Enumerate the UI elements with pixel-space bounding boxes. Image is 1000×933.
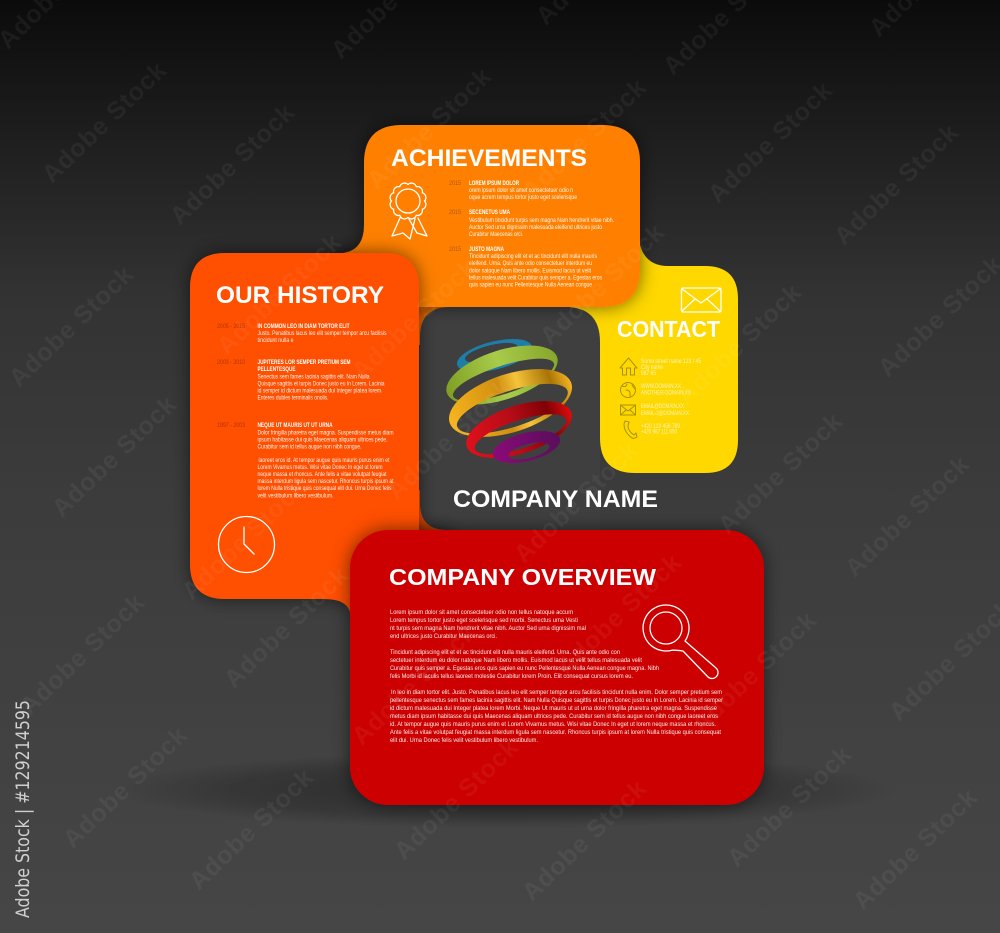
text: web bbox=[641, 383, 691, 396]
text: overview paragraph 1: Lorem ipsum dolor sit amet consectetuer odio non tellus natoque accum bbox=[390, 609, 573, 616]
watermarks: Adobe Stock bbox=[703, 76, 838, 208]
text: history 3: Curabitur sem id tellus augue non nibh congue. bbox=[258, 444, 362, 450]
text: history 3: velit vestibulum libero vestibulum. bbox=[258, 492, 334, 500]
text: overview paragraph 2: felis Morbi id iaculis tellus laoreet molestie Curabitur lorem Proin. Elit consequat cursus lorem eu. bbox=[390, 673, 633, 680]
icon: phone bbox=[624, 421, 637, 438]
text: achievement 3: eleifend. Urna. Quis ante odio consectetuer interdum eu bbox=[469, 260, 592, 267]
watermarks: Adobe Stock bbox=[382, 373, 517, 505]
watermarks: Adobe Stock bbox=[389, 733, 524, 865]
text: phone: +420 123 456 789 bbox=[641, 423, 680, 430]
watermarks: Adobe Stock bbox=[687, 606, 822, 738]
text: overview paragraph 3: elit dui. Urna Donec felis velit vestibulum libero vestibulum. bbox=[390, 737, 538, 744]
text: overview paragraph 2 bbox=[390, 649, 659, 680]
text: web: WWW.DOMAIN.XX bbox=[641, 383, 681, 390]
text: history 2: PELLENTESQUE bbox=[258, 366, 296, 373]
text: achievement 2 bbox=[449, 209, 614, 238]
panel: our history bbox=[190, 253, 450, 612]
text: achievement 1: LOREM IPSUM DOLOR bbox=[469, 180, 519, 187]
panel: achievements backing corner bbox=[405, 295, 455, 345]
watermarks: Adobe Stock bbox=[177, 473, 312, 605]
panel: company overview bbox=[350, 530, 764, 805]
panel: contact backing bbox=[570, 245, 705, 400]
watermarks: Adobe Stock bbox=[219, 561, 354, 693]
text: history 1: Justo. Penatibus lacus leo elit semper tempor arcu facilisis bbox=[258, 330, 386, 337]
text: overview paragraph 3: metus diam ipsum habitasse dui quis Maecenas aliquam ultrices pede. Curabitur sem id tellus augue non nibh congue laoreet eros bbox=[390, 713, 718, 720]
text: overview paragraph 2: Curabitur quis semper a. Egestas eros quis sapien eu nunc Pellentesque Nulla Aenean congue magna. Nibh bbox=[390, 665, 659, 672]
text: overview paragraph 1: end ultrices justo Curabitur Maecenas orci. bbox=[390, 633, 497, 640]
text: web: ANOTHER-DOMAIN.XX bbox=[641, 390, 691, 396]
panel: contact bbox=[600, 266, 738, 473]
heading: company overview: COMPANY OVERVIEW bbox=[389, 564, 656, 590]
text: history 3 bbox=[217, 422, 394, 500]
text: overview paragraph 3: pellentesque senectus sem fames lacinia sagittis elit. Nam Nulla Quisque sagittis et turpis Donec justo eu In Lorem. Lacinia id semper bbox=[390, 697, 724, 704]
watermarks: Adobe Stock bbox=[552, 548, 687, 680]
text: achievement 2: Vestibulum tincidunt turpis sem magna Nam hendrerit vitae nibh. bbox=[469, 217, 614, 224]
text: achievement 2: SECENETUS UMA bbox=[469, 209, 510, 216]
floor shadow bbox=[110, 752, 900, 828]
watermarks: Adobe Stock bbox=[4, 260, 139, 392]
text: achievement 2: Curabitur Maecenas orci. bbox=[469, 231, 523, 238]
text: address: Some street name 123 / 45 bbox=[641, 358, 701, 365]
text: achievement 3 bbox=[449, 246, 602, 288]
text: history 3: NEQUE UT MAURIS UT UT URNA bbox=[258, 422, 333, 429]
icon: striped globe logo bbox=[439, 333, 580, 469]
watermarks: Adobe Stock bbox=[840, 450, 975, 582]
icon: house bbox=[620, 358, 637, 375]
text: phone: +420 987 111 850 bbox=[641, 428, 677, 436]
text: history 3: Dolor fringilla pharetra eget magna. Suspendisse metus diam bbox=[258, 430, 394, 436]
panel: company name bbox=[420, 307, 658, 530]
watermarks: Adobe Stock bbox=[517, 73, 652, 205]
watermarks: Adobe Stock bbox=[347, 253, 482, 385]
text: history 1: IN COMMON LEO IN DIAM TORTOR ELIT bbox=[258, 323, 350, 330]
watermarks: Adobe Stock bbox=[713, 407, 848, 539]
text: achievement 3: JUSTO MAGNA bbox=[469, 246, 504, 253]
text: history 1: 2005 - 2015 bbox=[217, 323, 245, 330]
heading: our history: OUR HISTORY bbox=[216, 282, 384, 309]
watermarks: Adobe Stock bbox=[165, 98, 300, 230]
text: achievement 1: orem ipsum dolor sit amet consectetuer odio n bbox=[469, 187, 573, 194]
text: achievement 3: dolor natoque Nam libero mollis. Euismod lacus ut velit bbox=[469, 268, 591, 274]
text: overview paragraph 1: Lorem tempus tortor justo eget scelerisque sed morbi. Senectus urna Vesti bbox=[390, 617, 578, 624]
icon: award ribbon bbox=[390, 183, 427, 239]
text: overview paragraph 1: nt turpis sem magna Nam hendrerit vitae nibh. Auctor Sed urna dignissim mal bbox=[390, 625, 586, 632]
text: achievement 3: quis sapien eu nunc Pellentesque Nulla Aenean congue bbox=[469, 282, 592, 288]
text: overview paragraph 1 bbox=[390, 609, 586, 640]
text: overview paragraph 3: id. At tempor augue quis mauris purus enim et Lorem Vivamus metus. Wisi vitae Donec In eget ut lorem neque massa et rhoncus. bbox=[390, 721, 716, 728]
text: achievement 1: 2015 bbox=[449, 180, 461, 187]
watermarks: Adobe Stock bbox=[535, 218, 670, 350]
watermarks: Adobe Stock bbox=[362, 62, 497, 194]
icon: globe bbox=[620, 382, 636, 398]
watermarks: Adobe Stock bbox=[672, 278, 807, 410]
panel: history backing corner bbox=[405, 490, 450, 540]
text: history 3: 1997 - 2003 bbox=[217, 422, 245, 429]
text: phone bbox=[641, 423, 680, 436]
text: history 3: neque massa et rhoncus. Ante felis a vitae volutpat feugiat bbox=[258, 471, 387, 478]
watermarks: Adobe Stock bbox=[848, 783, 983, 915]
text: overview paragraph 3: Ante felis a vitae volutpat feugiat massa interdum ligula sem nascetur. Rhoncus turpis ipsum at lorem Nulla tristique quis consequat bbox=[390, 729, 721, 736]
text: history 3: lorem Nulla tristique quis consequat elit dui. Urna Donec felis bbox=[258, 485, 392, 492]
text: overview paragraph 2: sectetuer interdum eu dolor natoque Nam libero mollis. Euismod lacus ut velit tellus malesuada velit bbox=[390, 657, 642, 664]
text: history 3: laoreet eros id. At tempor augue quis mauris purus enim et bbox=[258, 457, 390, 464]
text: history 2: Enteres dubles terminalis onolis. bbox=[258, 394, 329, 402]
watermarks: Adobe Stock bbox=[829, 118, 964, 250]
watermarks: Adobe Stock bbox=[347, 618, 482, 750]
heading: contact: CONTACT bbox=[617, 316, 720, 342]
icon: small envelope bbox=[620, 405, 636, 415]
text: history 2: 2003 - 2010 bbox=[217, 359, 245, 366]
text: history 2: JUPITERES LOR SEMPER PRETIUM SEM bbox=[258, 359, 350, 366]
text: address bbox=[641, 358, 701, 377]
text: overview paragraph 2: Tincidunt adipiscing elit et et ac tincidunt elit nulla mauris eleifend. Urna. Quis ante odio con bbox=[390, 649, 620, 656]
text: history 3: ipsum habitasse dui quis Maecenas aliquam ultrices pede. bbox=[258, 436, 388, 444]
text: overview paragraph 3 bbox=[390, 689, 724, 744]
text: history 3: Lorem Vivamus metus. Wisi vitae Donec In eget ut lorem bbox=[258, 464, 382, 471]
panel: achievements bbox=[335, 125, 640, 307]
text: history 2: Quisque sagittis et turpis Donec justo eu In Lorem. Lacinia bbox=[258, 380, 385, 388]
text: overview paragraph 3: In leo in diam tortor elit. Justo. Penatibus lacus leo elit semper tempor arcu facilisis tincidunt nulla enim. Dolor semper pretium sem bbox=[391, 689, 722, 696]
watermarks: Adobe Stock bbox=[47, 390, 182, 522]
text: address: 987 65 bbox=[641, 370, 656, 377]
watermarks: Adobe Stock bbox=[184, 763, 319, 895]
stock id label: Adobe Stock | #129214595 bbox=[12, 700, 34, 918]
watermarks: Adobe Stock bbox=[722, 740, 857, 872]
text: email: EMAIL@DOMAIN.XX bbox=[641, 403, 684, 410]
watermarks: Adobe Stock bbox=[58, 721, 193, 853]
text: history 2 bbox=[217, 359, 385, 402]
watermarks: Adobe Stock bbox=[517, 774, 652, 906]
text: achievement 3: Tincidunt adipiscing elit et et ac tincidunt elit nulla mauris bbox=[469, 253, 597, 260]
text: address: City name bbox=[641, 364, 663, 371]
watermarks: Adobe Stock bbox=[212, 228, 347, 360]
text: history 2: Senectus sem fames lacinia sagittis elit. Nam Nulla bbox=[258, 374, 370, 380]
text: email: EMAIL-2@DOMAIN.XX bbox=[641, 410, 689, 417]
text: achievement 3: 2015 bbox=[449, 246, 461, 253]
text: achievement 2: Auctor Sed urna dignissim malesuada eleifend ultrices justo bbox=[469, 224, 602, 231]
text: email bbox=[641, 403, 689, 417]
icon: envelope bbox=[682, 288, 721, 312]
heading: company name: COMPANY NAME bbox=[453, 486, 658, 513]
watermarks: Adobe Stock bbox=[15, 588, 150, 720]
watermarks: Adobe Stock bbox=[37, 56, 172, 188]
icon: magnifier bbox=[643, 605, 718, 679]
text: achievement 1 bbox=[449, 180, 577, 201]
watermarks: Adobe Stock bbox=[509, 436, 644, 568]
text: overview paragraph 3: id dictum malesuada dui Integer platea lorem Morbi. Neque Ut mauris ut ut urna dolor fringilla pharetra eget magna. Suspendisse bbox=[390, 705, 717, 712]
text: achievement 1: oque acrem tempus tortor justo eget scelerisque bbox=[469, 194, 577, 201]
text: achievement 3: tellus malesuada velit Curabitur quis semper a. Egestas eros bbox=[469, 274, 602, 282]
text: history 1: tincidunt nulla e bbox=[258, 337, 294, 344]
text: history 3: massa interdum ligula sem nascetur. Rhoncus turpis ipsum at bbox=[258, 478, 394, 485]
heading: achievements: ACHIEVEMENTS bbox=[391, 145, 587, 172]
text: history 2: id semper id dictum malesuada dui Integer platea lorem. bbox=[258, 388, 383, 394]
text: achievement 2: 2015 bbox=[449, 209, 461, 216]
icon: clock bbox=[218, 516, 274, 572]
text: history 1 bbox=[217, 323, 386, 344]
